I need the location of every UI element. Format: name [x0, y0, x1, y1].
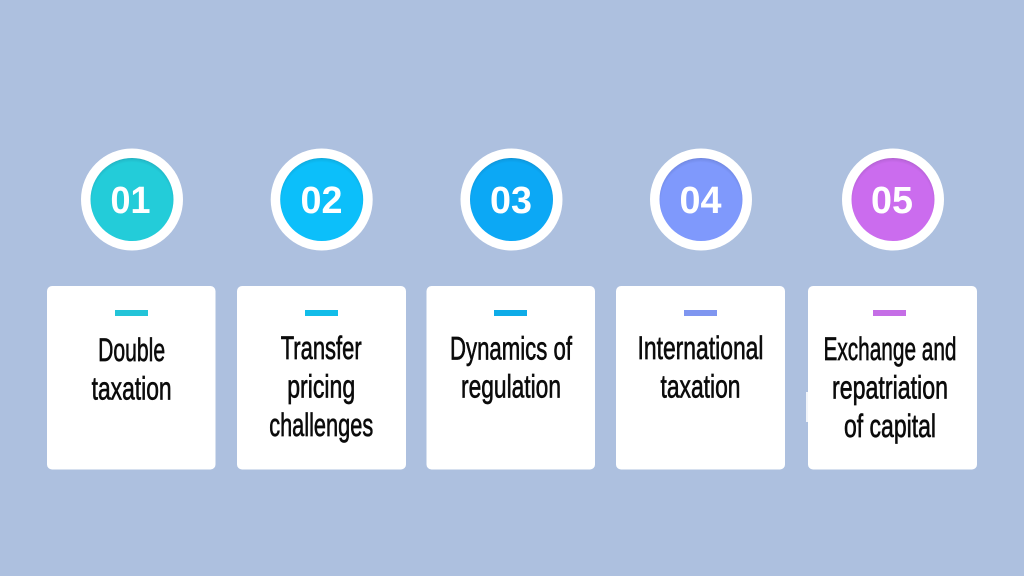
- column 2: transfer pricing challenges: [237, 148, 406, 470]
- number badge 05: [842, 148, 944, 250]
- number badge 04: [650, 148, 752, 250]
- column 5: exchange and repatriation of capital: [806, 148, 977, 470]
- number badge 04: 04: [680, 180, 722, 222]
- column 4: international taxation: [616, 148, 785, 470]
- number badge 03: [460, 148, 562, 250]
- number badge 01: 01: [110, 180, 150, 222]
- number badge 02: 02: [300, 180, 342, 222]
- card 3: Dynamics of: [450, 330, 572, 366]
- number badge 01: [81, 148, 183, 250]
- card 2: [237, 286, 406, 470]
- card 1: Double: [98, 332, 165, 368]
- card 4: [616, 286, 785, 470]
- number badge 03: 03: [490, 180, 532, 222]
- column 1: double taxation: [47, 148, 216, 470]
- card 5: [806, 286, 977, 470]
- card 1: taxation: [92, 370, 172, 406]
- card 4: International: [638, 330, 764, 366]
- card 1: [47, 286, 216, 470]
- card 5: Exchange and: [824, 331, 956, 367]
- card 5: repatriation: [832, 370, 948, 406]
- card 5: of capital: [844, 408, 936, 444]
- card 2: pricing: [287, 368, 355, 404]
- card 2: challenges: [269, 407, 373, 443]
- card 2: Transfer: [281, 330, 362, 366]
- card 4: taxation: [660, 368, 740, 404]
- column 3: dynamics of regulation: [426, 148, 595, 470]
- number badge 05: 05: [871, 180, 913, 222]
- card 3: [426, 286, 595, 470]
- number badge 02: [271, 148, 373, 250]
- card 3: regulation: [461, 368, 561, 404]
